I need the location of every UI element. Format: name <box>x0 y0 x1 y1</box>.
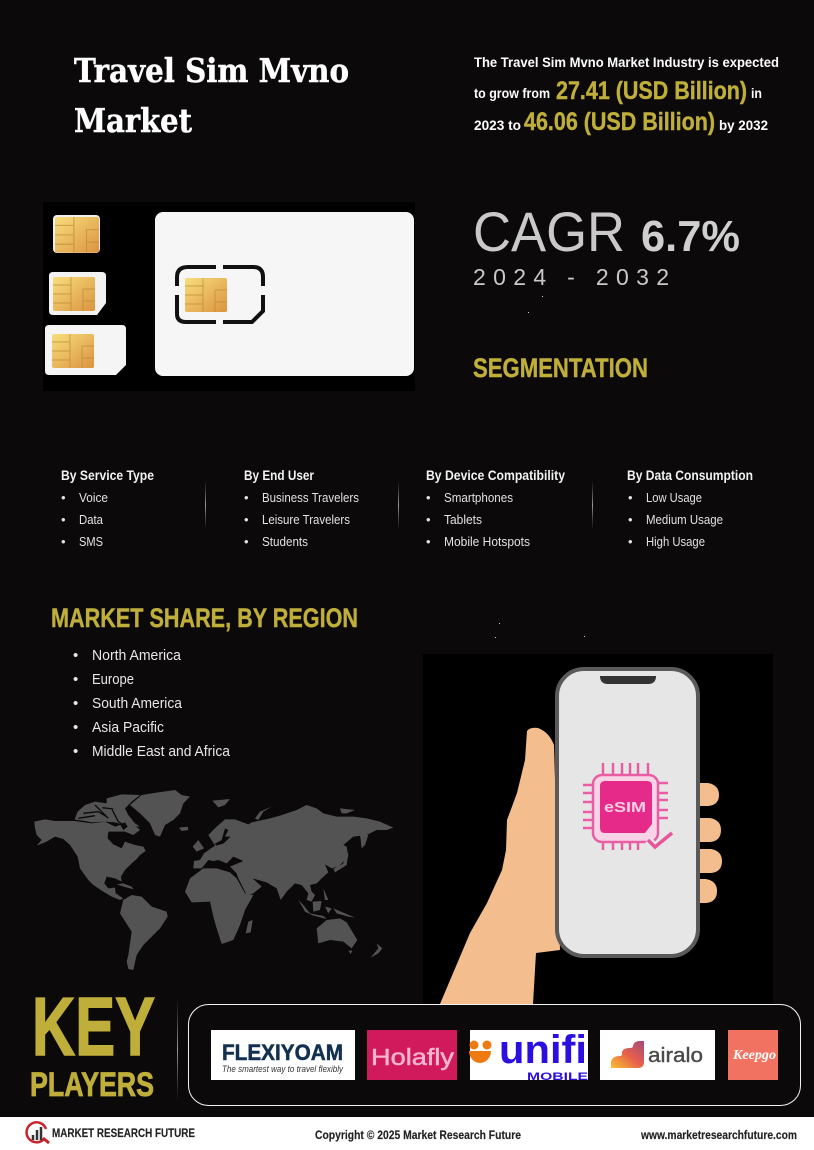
segment column: data consumption: • <box>628 512 633 527</box>
region list: North America <box>92 647 182 664</box>
market forecast text: to grow from <box>474 85 550 101</box>
North America <box>34 819 146 900</box>
Siberian islands <box>340 808 355 813</box>
Iceland <box>179 827 188 831</box>
fingers <box>695 783 722 903</box>
Japan <box>333 852 348 872</box>
logo: Flexiroam: FLEXIYOAM <box>222 1040 343 1065</box>
eSIM chip icon <box>583 763 672 850</box>
Cuba <box>117 883 134 889</box>
CAGR: 6.7% <box>641 212 740 261</box>
market share heading: MARKET SHARE, BY REGION <box>51 603 358 633</box>
region list: • <box>73 647 78 664</box>
segment column: device compatibility: Smartphones <box>444 490 513 505</box>
eSIM chip icon: eSIM <box>604 799 646 816</box>
segment column: data consumption: Medium Usage <box>646 512 723 527</box>
specks <box>495 296 585 638</box>
Kamchatka <box>360 835 368 848</box>
footer: Copyright © 2025 Market Research Future <box>315 1128 521 1142</box>
Novaya Zemlya <box>255 807 272 820</box>
CAGR: 2024 - 2032 <box>473 264 669 290</box>
South America <box>120 895 168 970</box>
segment column: data consumption: By Data Consumption <box>627 467 753 483</box>
segment column: data consumption: Low Usage <box>646 490 702 505</box>
segment column: service type: Data <box>79 512 104 527</box>
market forecast text <box>474 54 779 136</box>
logo: Unifi Mobile: unifi <box>499 1028 587 1072</box>
segment column: device compatibility: By Device Compatibility <box>426 467 565 483</box>
segment column: data consumption: • <box>628 534 633 549</box>
segment column: data consumption: • <box>628 490 633 505</box>
CAGR <box>473 200 740 290</box>
segment column: service type <box>61 467 154 549</box>
image: hand holding phone with eSIM <box>423 654 773 1004</box>
title: Market <box>74 101 193 140</box>
Madagascar <box>246 920 253 933</box>
segment column: service type: SMS <box>79 534 103 549</box>
market forecast text: 46.06 (USD Billion) <box>524 108 715 136</box>
Africa <box>185 868 253 944</box>
segment column: service type: • <box>61 534 66 549</box>
region list: • <box>73 743 78 760</box>
segment column: data consumption <box>627 467 753 549</box>
standard SIM <box>45 325 126 375</box>
segment column: end user: • <box>244 534 249 549</box>
segment column: device compatibility: • <box>426 490 431 505</box>
segment column: end user: • <box>244 512 249 527</box>
market forecast text: in <box>751 85 762 101</box>
image: SIM card sizes <box>43 202 415 391</box>
logo: Holafly <box>367 1030 457 1080</box>
key players heading: PLAYERS <box>30 1066 154 1104</box>
region list: Middle East and Africa <box>92 743 231 760</box>
logo: Unifi Mobile: MOBILE <box>527 1071 588 1083</box>
segment column: service type: • <box>61 490 66 505</box>
footer <box>0 1117 814 1150</box>
market forecast text: 27.41 (USD Billion) <box>556 77 747 105</box>
segment column: service type: Voice <box>79 490 108 505</box>
footer: MARKET RESEARCH FUTURE <box>52 1126 195 1140</box>
CAGR: CAGR <box>473 200 625 263</box>
segment column: device compatibility <box>426 467 565 549</box>
segmentation heading: SEGMENTATION <box>473 353 648 383</box>
notch <box>600 676 656 684</box>
logo: Airalo <box>600 1030 715 1080</box>
region list: • <box>73 719 78 736</box>
Australia <box>317 918 357 954</box>
segment column: device compatibility: Mobile Hotspots <box>444 534 530 549</box>
hand <box>440 728 560 1004</box>
Svalbard <box>212 799 230 807</box>
Canadian Arctic islands <box>75 794 140 827</box>
Baltic Sea <box>215 828 231 846</box>
Eurasia <box>193 805 393 902</box>
title <box>74 51 349 140</box>
key players heading: KEY <box>32 980 155 1073</box>
phone body <box>557 669 698 956</box>
micro SIM <box>49 272 106 315</box>
segment column: service type: • <box>61 512 66 527</box>
market forecast text: The Travel Sim Mvno Market Industry is expected <box>474 54 779 70</box>
region list: Europe <box>92 671 134 688</box>
segment column: end user: • <box>244 490 249 505</box>
segment column: end user: Business Travelers <box>262 490 359 505</box>
logo: Keepgo <box>728 1030 778 1080</box>
region list <box>73 647 231 760</box>
title: Travel Sim Mvno <box>74 51 349 90</box>
logo: Keepgo: Keepgo <box>732 1048 776 1063</box>
segment column: data consumption: High Usage <box>646 534 705 549</box>
segment column: end user: By End User <box>244 467 314 483</box>
segment column: end user <box>244 467 359 549</box>
UK <box>193 840 204 852</box>
full SIM card <box>155 212 414 376</box>
region list: Asia Pacific <box>92 719 164 736</box>
segment column: device compatibility: • <box>426 534 431 549</box>
key players heading <box>30 980 155 1104</box>
logo: Flexiroam <box>211 1030 355 1080</box>
logo: Unifi Mobile <box>469 1028 588 1083</box>
segment column: end user: Students <box>262 534 308 549</box>
region list: • <box>73 671 78 688</box>
region list: South America <box>92 695 183 712</box>
logo: Flexiroam: The smartest way to travel flexibly <box>222 1064 343 1074</box>
nano SIM <box>53 215 100 253</box>
Indonesia and Philippines <box>298 888 355 919</box>
world map <box>34 790 393 970</box>
key players panel <box>188 1004 800 1106</box>
footer logo <box>27 1122 49 1143</box>
New Zealand <box>371 943 382 958</box>
segment column: device compatibility: • <box>426 512 431 527</box>
segment column: service type: By Service Type <box>61 467 154 483</box>
segment column: end user: Leisure Travelers <box>262 512 350 527</box>
logo: Holafly: Holafly <box>371 1044 455 1070</box>
logo: Airalo: airalo <box>648 1045 703 1067</box>
Greenland <box>130 790 190 837</box>
market forecast text: 2023 to <box>474 117 521 133</box>
segment column: device compatibility: Tablets <box>444 512 482 527</box>
region list: • <box>73 695 78 712</box>
market forecast text: by 2032 <box>719 117 768 133</box>
